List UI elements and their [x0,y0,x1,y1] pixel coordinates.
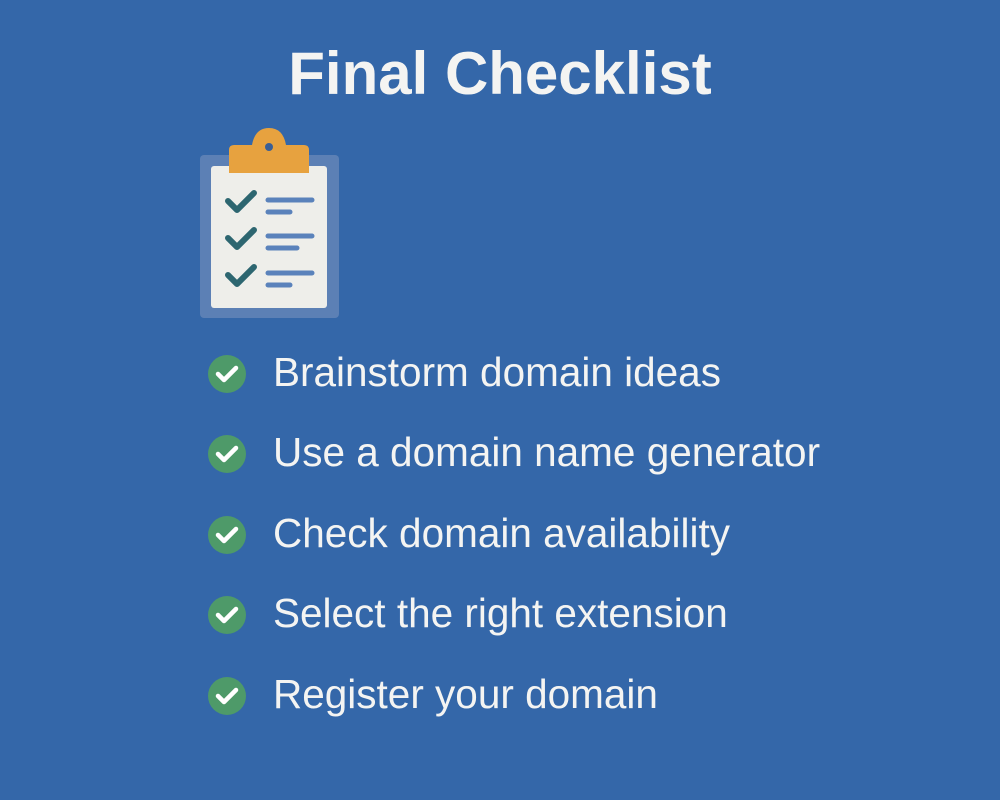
icon: clipboard [200,128,339,318]
title: Final Checklist [288,40,712,107]
checklist item 4: Select the right extension [273,590,728,636]
checklist item 5: Register your domain [273,671,658,717]
checklist item 2: Use a domain name generator [273,429,820,475]
checklist item 3: Check domain availability [273,510,730,556]
checklist item 1: Brainstorm domain ideas [273,349,721,395]
